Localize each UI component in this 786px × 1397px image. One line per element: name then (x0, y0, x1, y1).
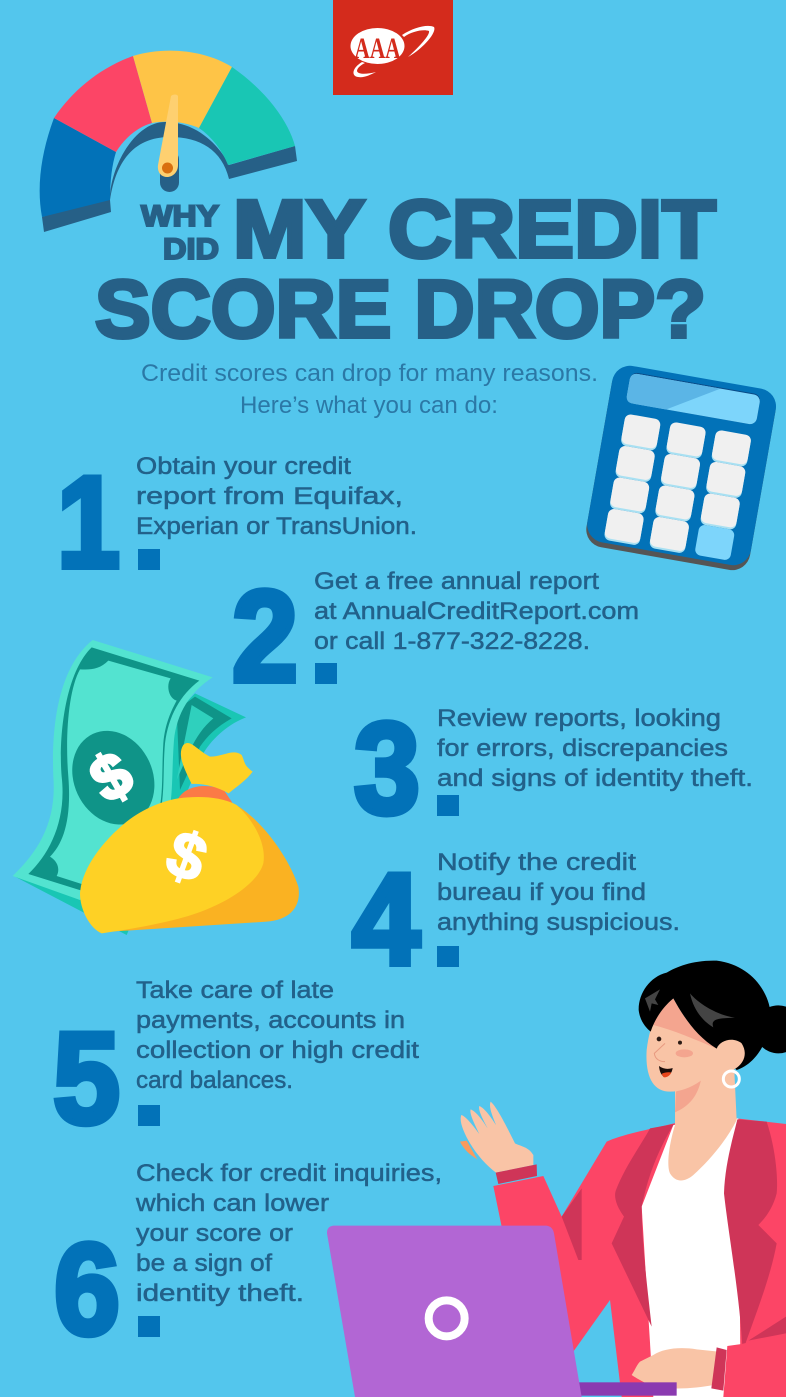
ear (717, 1040, 745, 1071)
step 5: payments, accounts in (136, 1007, 405, 1034)
step 5: Take care of late (136, 977, 334, 1004)
step 2: 2 (232, 563, 298, 709)
step 3: for errors, discrepancies (437, 735, 728, 762)
step 1: Experian or TransUnion. (136, 513, 417, 540)
AAA logo: AAA (354, 32, 401, 65)
step 4: anything suspicious. (437, 909, 680, 936)
step 4: Notify the credit (437, 849, 636, 876)
step 4: 4 (352, 846, 420, 992)
step 6: which can lower (135, 1190, 329, 1217)
step 5: card balances. (136, 1067, 293, 1094)
step 3: 3 (354, 695, 420, 841)
step 5: 5 (53, 1005, 120, 1151)
step 2 (232, 563, 639, 709)
intro text: Here’s what you can do: (240, 392, 498, 419)
jacket (493, 1118, 786, 1397)
icon: credit score gauge (40, 51, 297, 232)
lower hand (632, 1333, 786, 1397)
step 4 (352, 846, 680, 992)
face (646, 998, 725, 1092)
jacket shadow (562, 1188, 582, 1260)
icon: calculator (583, 363, 779, 573)
neck and chest (668, 1050, 737, 1180)
AAA logo (333, 0, 453, 95)
earring (723, 1071, 739, 1087)
step 6: Check for credit inquiries, (136, 1160, 442, 1187)
step 2: at AnnualCreditReport.com (314, 598, 639, 625)
eyes and cheeks (654, 1037, 693, 1077)
title: SCORE DROP? (95, 264, 706, 355)
title: DID (163, 233, 219, 266)
step 4: bureau if you find (437, 879, 646, 906)
shirt (642, 1118, 741, 1397)
laptop base (577, 1382, 677, 1396)
step 2: Get a free annual report (314, 568, 599, 595)
step 3: and signs of identity theft. (437, 765, 753, 792)
step 5: collection or high credit (136, 1037, 419, 1064)
step 6: be a sign of (136, 1250, 272, 1277)
title: MY CREDIT (233, 184, 716, 275)
step 1: Obtain your credit (136, 453, 351, 480)
title: WHY (141, 200, 219, 233)
step 2: or call 1-877-322-8228. (314, 628, 590, 655)
step 1: 1 (57, 449, 120, 595)
step 6: identity theft. (136, 1280, 304, 1307)
step 6 (54, 1160, 442, 1362)
lapels (612, 1124, 674, 1327)
step 6: your score or (136, 1220, 293, 1247)
step 3: Review reports, looking (437, 705, 721, 732)
title (95, 184, 716, 355)
step 3 (354, 695, 753, 841)
neck shadow (675, 1077, 702, 1112)
intro text (141, 360, 598, 419)
step 1: report from Equifax, (136, 483, 403, 510)
icon: cash and money bag: $ (79, 738, 144, 816)
step 5 (53, 977, 419, 1151)
illustration: woman with laptop (327, 961, 786, 1397)
step 6: 6 (54, 1216, 120, 1362)
laptop (327, 1226, 582, 1397)
icon: cash and money bag: $ (157, 815, 216, 896)
hair (639, 961, 771, 1070)
step 1 (57, 449, 417, 595)
raised hand (460, 1102, 537, 1184)
intro text: Credit scores can drop for many reasons. (141, 360, 598, 387)
icon: cash and money bag (13, 640, 299, 935)
